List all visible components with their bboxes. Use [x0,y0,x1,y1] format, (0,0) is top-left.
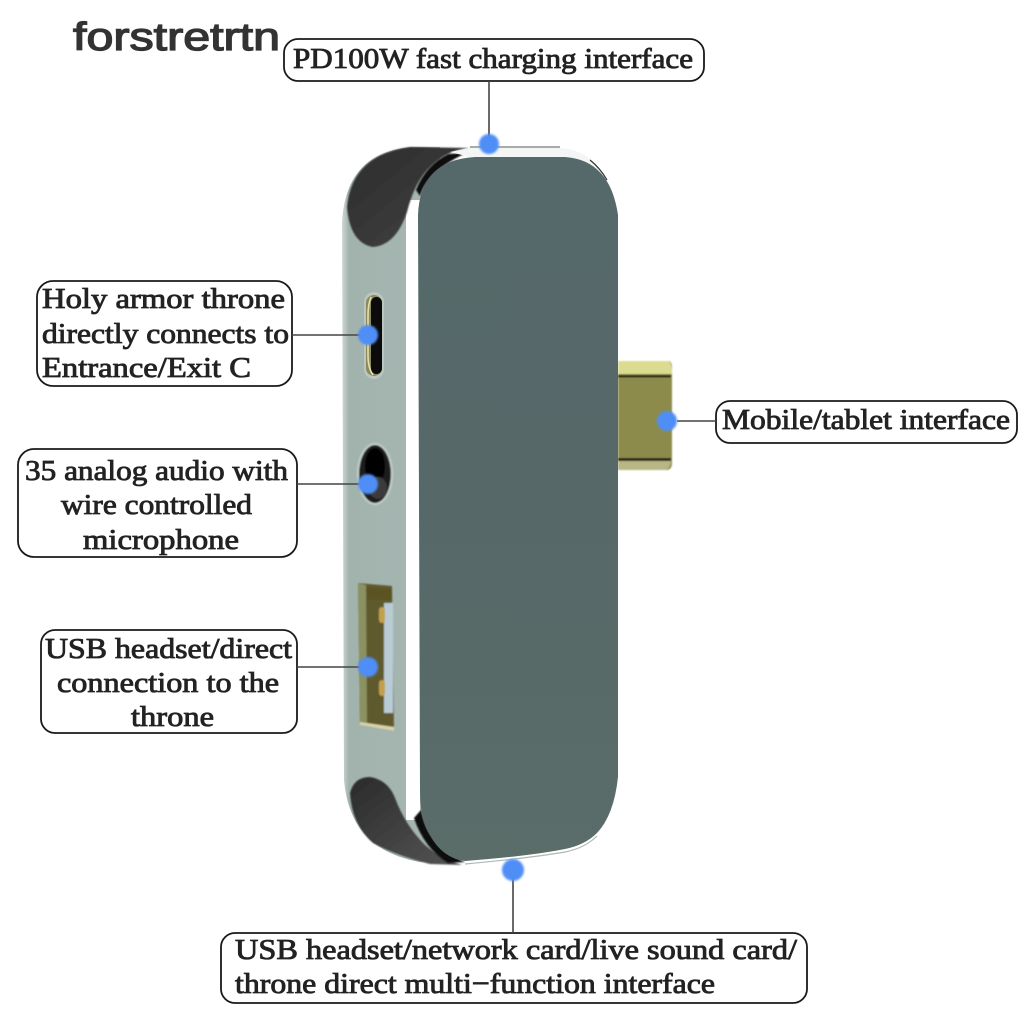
callout: multi-function [221,933,807,1003]
white bevel strip [406,200,420,820]
callout: Holy armor: directly connects to [42,318,289,350]
top edge highlight [450,148,615,200]
bottom edge highlight [465,836,597,864]
port: audio jack [357,443,393,505]
leader line: analog audio [297,483,368,485]
marker: Holy armor [358,325,378,345]
port: USB-A [358,583,394,731]
leader line: Holy armor [292,334,368,336]
callout: multi-function: USB headset/network card/live sound card/ [235,934,798,966]
panel: front face [418,157,618,861]
callout: PD100W: PD100W fast charging interface [293,43,693,75]
device body [342,147,618,865]
callout: USB headset: throne [131,701,214,733]
shadow rim bottom [414,810,465,863]
shadow rim top [416,153,466,196]
watermark: forstretrtn [73,16,280,59]
callout: USB headset: USB headset/direct [45,633,292,665]
callout: analog audio: wire controlled [61,489,253,521]
callout: Mobile/tablet: Mobile/tablet interface [722,404,1010,436]
port: USB-C [364,292,384,379]
callout: analog audio: 35 analog audio with [25,455,289,487]
bottom dark corner [350,777,462,865]
marker: PD100W [479,134,499,154]
top edge line [470,146,560,148]
side panel [342,147,440,862]
marker: multi-function [502,859,524,881]
leader line: PD100W [488,81,490,144]
callout: Mobile/tablet [716,401,1017,443]
callout: Holy armor: Holy armor throne [42,283,285,315]
callout: PD100W [284,39,704,81]
callout: analog audio [18,449,297,557]
callout: USB headset: connection to the [57,667,279,699]
top-right rim [590,160,607,180]
callout: USB headset [41,630,297,733]
marker: Mobile/tablet [657,411,677,431]
connector: mobile/tablet plug [618,361,672,470]
leader line: USB headset [297,666,368,668]
callout: multi-function: throne direct multi−function interface [235,968,715,1000]
leader line: Mobile/tablet [677,420,716,422]
leader line: multi-function [512,870,514,933]
callout: Holy armor [37,281,292,386]
top dark corner [347,147,470,247]
marker: analog audio [358,474,378,494]
callout: Holy armor: Entrance/Exit C [42,352,251,384]
callout: analog audio: microphone [83,524,239,556]
marker: USB headset [358,657,378,677]
